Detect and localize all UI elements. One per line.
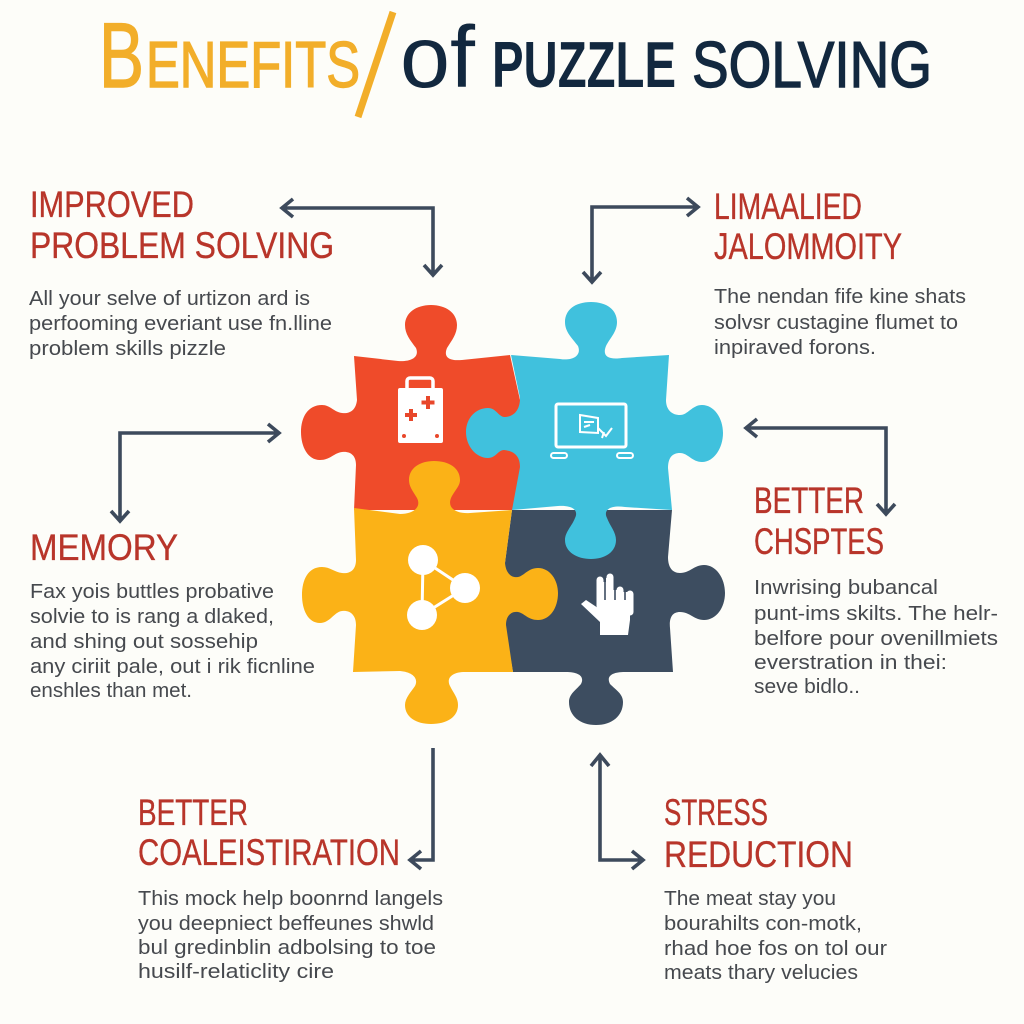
heading: [754, 480, 884, 562]
heading: [664, 792, 853, 875]
heading: JALOMMOITY: [714, 226, 902, 267]
text block: husilf-relaticlity cire: [138, 961, 334, 983]
icon: laptop: [551, 404, 633, 458]
piece: yellow: [302, 461, 558, 724]
panel: stress reduction: [664, 792, 887, 984]
heading: BETTER: [754, 480, 864, 521]
heading: PROBLEM SOLVING: [30, 225, 334, 266]
panel: memory: [30, 527, 315, 702]
heading: MEMORY: [30, 527, 178, 568]
text block: [138, 888, 443, 983]
piece: blue: [466, 302, 723, 559]
text block: punt-ims skilts. The helr-: [754, 603, 998, 625]
heading: STRESS: [664, 792, 768, 833]
heading: CHSPTES: [754, 521, 884, 562]
arrow: top right: [583, 198, 698, 282]
text block: [754, 577, 998, 698]
icon: molecule: [407, 545, 480, 630]
heading: IMPROVED: [30, 184, 194, 225]
text block: Inwrising bubancal: [754, 577, 938, 599]
title: B: [99, 5, 144, 107]
text block: [714, 286, 966, 359]
heading: REDUCTION: [664, 834, 853, 875]
panel: improved problem solving: [29, 184, 334, 360]
title: of: [400, 9, 476, 106]
title: PUZZLE: [492, 28, 676, 101]
icon: hand: [581, 577, 630, 635]
text block: The meat stay you: [664, 888, 836, 910]
arrow: bottom right: [591, 755, 643, 869]
text block: enshles than met.: [30, 680, 192, 702]
text block: and shing out sossehip: [30, 631, 258, 653]
puzzle: [301, 302, 725, 725]
text block: [29, 288, 332, 360]
heading: BETTER: [138, 792, 248, 833]
heading: LIMAALIED: [714, 186, 862, 227]
text block: solvie to is rang a dlaked,: [30, 606, 274, 628]
text block: belfore pour ovenillmiets: [754, 628, 998, 650]
heading: [138, 792, 400, 873]
text block: Fax yois buttles probative: [30, 581, 274, 603]
panel: better chsptes: [754, 480, 998, 698]
text block: seve bidlo..: [754, 676, 860, 698]
text block: inpiraved forons.: [714, 337, 876, 359]
heading: COALEISTIRATION: [138, 832, 400, 873]
text block: meats thary velucies: [664, 962, 858, 984]
text block: you deepniect beffeunes shwld: [138, 913, 434, 935]
text block: bul gredinblin adbolsing to toe: [138, 937, 436, 959]
title: SOLVING: [692, 28, 932, 101]
piece: red: [301, 305, 520, 510]
text block: rhad hoe fos on tol our: [664, 938, 887, 960]
text block: This mock help boonrnd langels: [138, 888, 443, 910]
text block: bourahilts con-motk,: [664, 913, 862, 935]
icon: medical bag: [398, 378, 443, 443]
arrow: middle left: [111, 424, 279, 521]
text block: [664, 888, 887, 984]
text block: All your selve of urtizon ard is: [29, 288, 310, 310]
text block: any ciriit pale, out i rik ficnline: [30, 656, 315, 678]
text block: everstration in thei:: [754, 652, 947, 674]
panel: limaalied jalommoity: [714, 186, 966, 359]
text block: The nendan fife kine shats: [714, 286, 966, 308]
heading: [714, 186, 902, 267]
arrow: top left: [282, 199, 442, 275]
panel: better coaleistiration: [138, 792, 443, 983]
text block: problem skills pizzle: [29, 338, 226, 360]
piece: navy: [500, 510, 725, 725]
text block: [30, 581, 315, 702]
text block: solvsr custagine flumet to: [714, 312, 958, 334]
arrow: bottom left: [410, 748, 433, 869]
arrow: middle right: [746, 419, 895, 514]
title: ENEFITS: [146, 28, 360, 101]
text block: perfooming everiant use fn.lline: [29, 313, 332, 335]
title: [99, 5, 932, 117]
heading: [30, 184, 334, 266]
